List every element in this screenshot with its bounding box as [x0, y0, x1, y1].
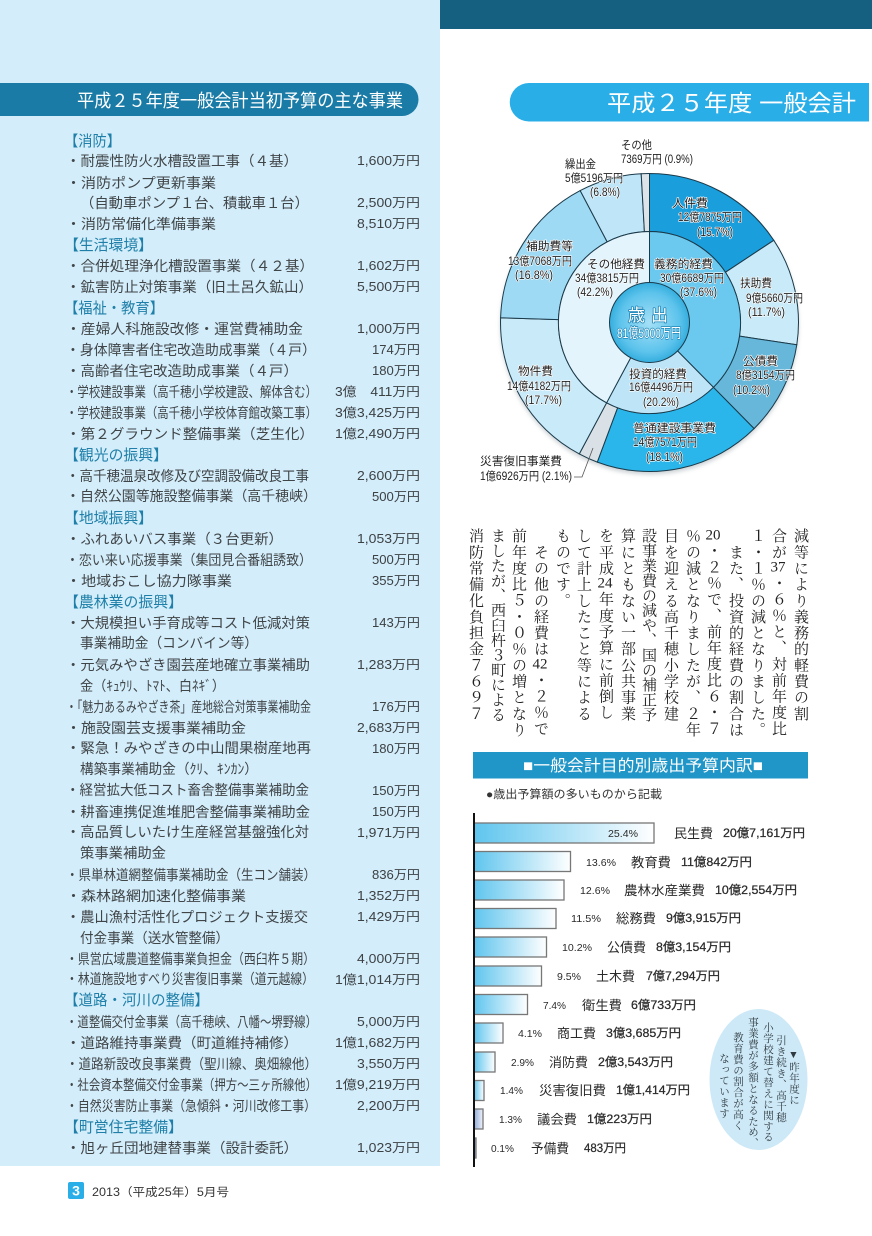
list: section headings: 【道路・河川の整備】 — [64, 992, 209, 1009]
list: project amounts: 1,023万円 — [357, 1141, 420, 1155]
list: project amounts: 5,500万円 — [357, 280, 420, 294]
list: project names: ・恋い来い応援事業（集団見合番組誘致） — [66, 552, 312, 568]
list: project amounts: 355万円 — [372, 574, 420, 588]
donut labels: (42.2%) — [577, 287, 613, 299]
donut labels: 30億6689万円 — [660, 272, 724, 285]
donut labels: 7369万円 (0.9%) — [621, 154, 693, 166]
list: project amounts: 1億1,682万円 — [335, 1036, 420, 1050]
callout: oval note text: 小学校建て替えに関する — [762, 1022, 773, 1142]
list: project amounts: 1億9,219万円 — [335, 1078, 420, 1092]
chart: expenditure donut — [500, 173, 798, 474]
bar chart: budget by purpose: 6億733万円 — [631, 998, 696, 1012]
list: section headings: 【消防】 — [64, 133, 121, 150]
list: project amounts: 1,429万円 — [357, 910, 420, 924]
list: project names: ・産婦人科施設改修・運営費補助金 — [66, 321, 303, 337]
bar chart: budget by purpose: 総務費 — [616, 911, 656, 926]
text block: vertical body copy: ％の減となりましたが、２年 — [684, 528, 700, 738]
donut labels: (17.7%) — [525, 395, 562, 407]
list: project names: ・自然公園等施設整備事業（高千穂峡） — [66, 488, 317, 504]
list: section headings: 【町営住宅整備】 — [64, 1119, 183, 1136]
list: project amounts: 2,200万円 — [357, 1099, 420, 1113]
bar chart: budget by purpose: 1.4% — [500, 1085, 523, 1097]
donut center label — [617, 306, 681, 341]
list: project names: ・道整備交付金事業（高千穂峡、八幡～堺野線） — [66, 1014, 317, 1030]
donut labels: その他 — [621, 139, 652, 152]
callout: oval background — [710, 1009, 808, 1150]
bar chart: budget by purpose: 12.6% — [580, 885, 610, 897]
bar chart: budget by purpose: 13.6% — [586, 857, 616, 869]
list: project amounts: 1,352万円 — [357, 889, 420, 903]
bar chart: budget by purpose: 1億1,414万円 — [616, 1083, 690, 1097]
bar chart: budget by purpose: 教育費 — [631, 855, 671, 870]
list: project names: ・林道施設地すべり災害復旧事業（道元越線） — [66, 971, 314, 987]
heading: purpose breakdown bar — [473, 752, 808, 778]
donut labels: 繰出金 — [565, 157, 596, 171]
bar chart: budget by purpose: 災害復旧費 — [539, 1083, 606, 1098]
bar chart: budget by purpose — [473, 813, 805, 1167]
list: project names: 構築事業補助金（ｸﾘ、ｷﾝｶﾝ） — [80, 761, 258, 777]
donut labels: その他経費 — [587, 257, 645, 271]
text block: vertical body copy: その他の経費は 42 ・２％で — [532, 544, 548, 737]
bar chart: budget by purpose: 9.5% — [557, 971, 581, 983]
callout: oval note text — [718, 1017, 800, 1148]
bar chart: budget by purpose: 消防費 — [549, 1055, 588, 1070]
list: project amounts: 1億1,014万円 — [335, 973, 420, 987]
bar chart: budget by purpose: 0.1% — [491, 1143, 514, 1155]
bar chart: budget by purpose: 衛生費 — [582, 998, 622, 1013]
callout: oval note text: 教育費の割合が高く — [732, 1032, 743, 1131]
donut labels: 公債費 — [743, 354, 778, 368]
donut labels: 普通建設事業費 — [633, 421, 716, 435]
bar chart: budget by purpose: 7億7,294万円 — [646, 969, 720, 983]
list: project names: ・鉱害防止対策事業（旧土呂久鉱山） — [66, 279, 313, 295]
list: project amounts: 2,600万円 — [357, 469, 420, 483]
bar chart: budget by purpose: 25.4% — [608, 828, 638, 840]
callout: oval note text: 引き続き、高千穂 — [775, 1035, 786, 1123]
bar chart: budget by purpose: 1億223万円 — [587, 1112, 652, 1126]
list: project names: ・身体障害者住宅改造助成事業（４戸） — [66, 342, 316, 358]
bar chart: budget by purpose: 9億3,915万円 — [666, 911, 741, 925]
list: project names: ・第２グラウンド整備事業（芝生化） — [66, 426, 314, 442]
donut labels: (10.2%) — [733, 385, 770, 397]
donut labels: 14億7571万円 — [633, 436, 697, 449]
callout: oval note text: なっています — [718, 1053, 729, 1119]
bar chart: budget by purpose: 7.4% — [543, 1000, 566, 1012]
list: project names: ・高齢者住宅改造助成事業（４戸） — [66, 363, 298, 379]
list: project amounts: 1,600万円 — [357, 154, 420, 168]
list: project names: ・学校建設事業（高千穂小学校建設、解体含む） — [66, 384, 317, 400]
text block: vertical body copy: 合が 37 ・６％と、対前年度比 — [770, 528, 786, 737]
callout: disaster recovery leader label: 災害復旧事業費 — [480, 454, 562, 468]
list: project names: ・森林路網加速化整備事業 — [66, 888, 246, 904]
list: project amounts: 180万円 — [372, 364, 420, 378]
text block: vertical body copy: 目を迎える高千穂小学校建 — [662, 528, 678, 722]
list: project amounts: 4,000万円 — [357, 952, 420, 966]
donut labels: 物件費 — [518, 364, 553, 378]
bar chart: budget by purpose: 8億3,154万円 — [656, 940, 731, 954]
bar chart: budget by purpose: 10億2,554万円 — [715, 883, 797, 897]
text block: vertical body copy: 設事業費の減や、国の補正予 — [640, 528, 656, 722]
list: section headings: 【生活環境】 — [64, 237, 153, 254]
top header band — [440, 0, 872, 29]
donut labels: 人件費 — [672, 196, 708, 210]
text block: vertical body copy: 算にともない一部公共事業 — [619, 528, 635, 722]
donut labels: 8億3154万円 — [736, 369, 795, 382]
heading: general account — [510, 83, 869, 122]
text block: vertical body copy — [467, 528, 809, 738]
bar chart: budget by purpose: 11億842万円 — [681, 855, 752, 869]
list: project names: ・「魅力あるみやざき茶」産地総合対策事業補助金 — [66, 699, 311, 715]
donut labels: (16.8%) — [515, 270, 553, 282]
panel: main projects background — [0, 0, 440, 1166]
list: project names: ・地域おこし協力隊事業 — [66, 573, 232, 589]
donut labels: 16億4496万円 — [629, 381, 693, 394]
bar chart: budget by purpose: 土木費 — [596, 969, 635, 984]
bar chart: budget by purpose: 11.5% — [571, 913, 601, 925]
list: project amounts: 836万円 — [372, 868, 420, 882]
text block: vertical body copy: 消防常備化負担金７６９７ — [467, 528, 483, 722]
callout: oval note text: 事業費が多額となるため、 — [747, 1017, 758, 1148]
list: project names: 事業補助金（コンバイン等） — [80, 635, 258, 651]
bar chart: budget by purpose: 商工費 — [557, 1026, 596, 1041]
list: project amounts: 500万円 — [372, 553, 420, 567]
list: project names: ・大規模担い手育成等コスト低減対策 — [66, 615, 310, 631]
heading: general account: 平成２５年度 一般会計 — [607, 90, 856, 116]
heading: main projects — [0, 83, 419, 116]
bar chart: budget by purpose: 農林水産業費 — [624, 883, 705, 898]
text block: vertical body copy: ましたが、西臼杵３町による — [489, 528, 505, 722]
list: project amounts: 3億3,425万円 — [335, 406, 420, 420]
list: project names: ・旭ヶ丘団地建替事業（設計委託） — [66, 1140, 298, 1156]
list: project names: ・農山漁村活性化プロジェクト支援交 — [66, 909, 308, 925]
list: project amounts: 5,000万円 — [357, 1015, 420, 1029]
list: project names: ・自然災害防止事業（急傾斜・河川改修工事） — [66, 1098, 316, 1114]
text block: vertical body copy: を平成 24 年度予算に前倒し — [597, 528, 613, 721]
list: project names: ・元気みやざき園芸産地確立事業補助 — [66, 657, 310, 673]
list: project names: ・道路新設改良事業費（聖川線、奥畑線他） — [66, 1056, 317, 1072]
list: project names: ・社会資本整備交付金事業（押方～三ヶ所線他） — [66, 1077, 317, 1093]
footer: page number and issue date: 3 — [72, 1182, 80, 1198]
list: project names — [66, 153, 317, 1156]
donut center label: 81億5000万円 — [617, 325, 681, 341]
bar chart: budget by purpose: 20億7,161万円 — [723, 826, 805, 840]
text block: vertical body copy: して計上したこと等による — [575, 528, 591, 722]
callout: disaster recovery leader label: 1億6926万円 (2.1%) — [480, 470, 572, 483]
footer: page number and issue date — [68, 1182, 229, 1199]
text block: vertical body copy: 減等により義務的軽費の割 — [792, 528, 808, 722]
donut labels: 補助費等 — [526, 239, 573, 253]
list: section headings: 【観光の振興】 — [64, 447, 168, 464]
donut labels: 12億7875万円 — [678, 211, 742, 224]
list: project names: ・県単林道網整備事業補助金（生コン舗装） — [66, 867, 316, 883]
text block: vertical body copy: １・１％の減となりました。 — [749, 528, 765, 738]
list: project amounts: 2,500万円 — [357, 196, 420, 210]
list: project names: 金（ｷｭｳﾘ、ﾄﾏﾄ、白ﾈｷﾞ） — [80, 678, 225, 694]
list: project amounts: 150万円 — [372, 784, 420, 798]
bar chart: budget by purpose: 公債費 — [607, 940, 646, 955]
donut labels: (37.6%) — [680, 287, 717, 299]
bar chart: budget by purpose: 2億3,543万円 — [598, 1055, 673, 1069]
heading: purpose breakdown bar: ■一般会計目的別歳出予算内訳■ — [523, 756, 763, 775]
donut labels: 投資的経費 — [629, 367, 687, 381]
list: project amounts: 1億2,490万円 — [335, 427, 420, 441]
footer: page number and issue date: 2013（平成25年）5月号 — [92, 1185, 229, 1199]
donut labels: (18.1%) — [646, 452, 683, 464]
list: project names: ・消防ポンプ更新事業 — [66, 175, 216, 191]
list: project amounts: 3億 411万円 — [335, 385, 420, 399]
bar chart: budget by purpose: 2.9% — [511, 1057, 534, 1069]
donut labels: 扶助費 — [740, 276, 772, 290]
list: section headings: 【福祉・教育】 — [64, 300, 164, 317]
list: project amounts: 150万円 — [372, 805, 420, 819]
list: project amounts — [335, 154, 420, 1155]
bar chart: budget by purpose: 民生費 — [674, 826, 713, 841]
donut labels: (20.2%) — [643, 397, 679, 409]
list: project amounts: 1,283万円 — [357, 658, 420, 672]
list: project names: ・緊急！みやざきの中山間果樹産地再 — [66, 740, 311, 756]
list: project names: 策事業補助金 — [80, 845, 166, 861]
list: project amounts: 176万円 — [372, 700, 420, 714]
text block: vertical body copy: ものです。 — [554, 528, 570, 609]
list: project names: ・耐震性防火水槽設置工事（４基） — [66, 153, 298, 169]
bar chart: budget by purpose: 10.2% — [562, 942, 592, 954]
list: project names: 付金事業（送水管整備） — [80, 930, 229, 946]
donut labels: 34億3815万円 — [575, 272, 639, 285]
donut labels: (15.7%) — [697, 227, 733, 239]
list: project names: ・道路維持事業費（町道維持補修） — [66, 1035, 298, 1051]
callout: disaster recovery leader label — [480, 448, 593, 483]
bar chart: budget by purpose: 議会費 — [537, 1112, 577, 1127]
bar chart: budget by purpose: 予備費 — [531, 1141, 569, 1156]
chart note: ●歳出予算額の多いものから記載 — [486, 787, 663, 801]
list: project names: ・学校建設事業（高千穂小学校体育館改築工事） — [66, 405, 317, 421]
list: project names: ・合併処理浄化槽設置事業（４２基） — [66, 258, 314, 274]
list: project amounts: 180万円 — [372, 742, 420, 756]
list: project names: ・経営拡大低コスト畜舎整備事業補助金 — [66, 782, 309, 798]
donut labels: 14億4182万円 — [507, 380, 571, 393]
list: project names: ・高品質しいたけ生産経営基盤強化対 — [66, 824, 309, 840]
list: project names: ・ふれあいバス事業（３台更新） — [66, 531, 283, 547]
list: section headings — [64, 133, 209, 1136]
list: project names: ・消防常備化準備事業 — [66, 216, 216, 232]
list: project amounts: 500万円 — [372, 490, 420, 504]
donut labels: (11.7%) — [748, 307, 785, 319]
bar chart: budget by purpose: 3億3,685万円 — [606, 1026, 681, 1040]
list: section headings: 【地域振興】 — [64, 510, 153, 527]
list: project amounts: 3,550万円 — [357, 1057, 420, 1071]
donut labels — [507, 139, 803, 464]
list: project amounts: 8,510万円 — [357, 217, 420, 231]
text block: vertical body copy: 20 ・２％で、前年度比６・７ — [705, 528, 721, 737]
donut center label: 歳出 — [628, 306, 668, 325]
list: project amounts: 1,000万円 — [357, 322, 420, 336]
text block: vertical body copy: また、投資的経費の割合は — [727, 544, 743, 738]
bar chart: budget by purpose: 4.1% — [518, 1028, 542, 1040]
list: project amounts: 1,971万円 — [357, 826, 420, 840]
donut labels: 5億5196万円 — [565, 172, 623, 185]
list: project names: ・施設園芸支援事業補助金 — [66, 720, 246, 736]
donut labels: 13億7068万円 — [508, 255, 572, 268]
callout: oval note text: ▼昨年度に — [788, 1050, 799, 1105]
donut labels: 9億5660万円 — [746, 292, 803, 305]
bar chart: budget by purpose: 483万円 — [584, 1141, 626, 1155]
list: project amounts: 2,683万円 — [357, 721, 420, 735]
list: section headings: 【農林業の振興】 — [64, 594, 183, 611]
list: project amounts: 174万円 — [372, 343, 420, 357]
list: project names: ・耕畜連携促進堆肥舎整備事業補助金 — [66, 804, 310, 820]
list: project names: ・県営広域農道整備事業負担金（西臼杵５期） — [66, 951, 315, 967]
bar chart: budget by purpose: 1.3% — [499, 1114, 522, 1126]
list: project names: （自動車ポンプ１台、積載車１台） — [80, 195, 309, 211]
list: project amounts: 143万円 — [372, 616, 420, 630]
donut labels: 義務的経費 — [654, 257, 713, 271]
list: project names: ・高千穂温泉改修及び空調設備改良工事 — [66, 468, 309, 484]
heading: main projects: 平成２５年度一般会計当初予算の主な事業 — [77, 91, 403, 111]
list: project amounts: 1,053万円 — [357, 532, 420, 546]
donut labels: (6.8%) — [590, 187, 620, 199]
text block: vertical body copy: 前年度比５・０％の増となり — [510, 528, 526, 738]
list: project amounts: 1,602万円 — [357, 259, 420, 273]
